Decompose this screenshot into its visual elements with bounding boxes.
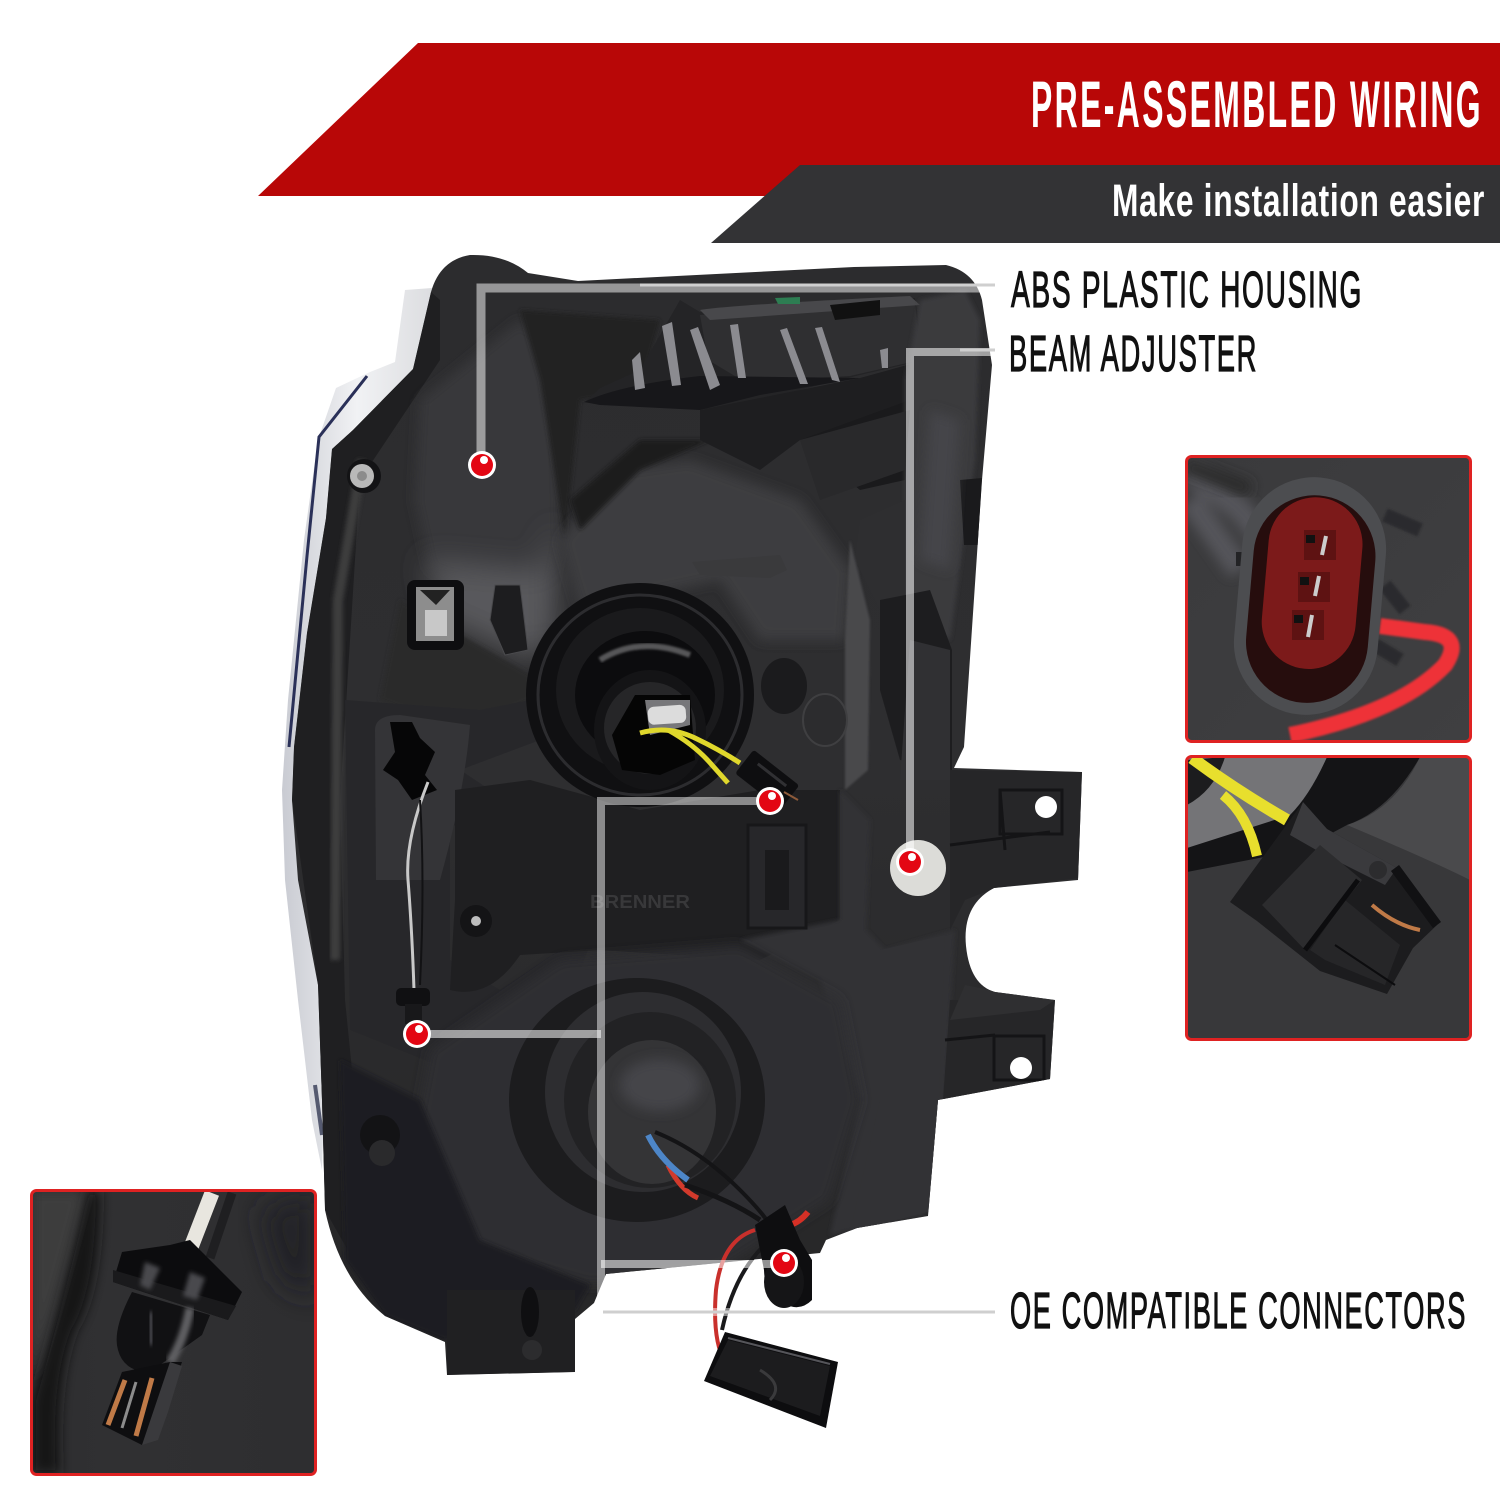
wire connector [735, 750, 799, 809]
recessed label [748, 825, 806, 928]
control box [704, 1332, 838, 1428]
callout line: ABS plastic housing [481, 285, 995, 455]
callout line: beam adjuster [910, 350, 995, 860]
banner: dark subtitle ribbon [711, 165, 1500, 243]
housing shading [292, 290, 1082, 1375]
pigtail wires [648, 1132, 808, 1362]
inset panel: wedge bulb socket [32, 1190, 316, 1474]
top ribs [632, 322, 888, 390]
pin hole [460, 905, 492, 937]
callout lines: OE connectors [417, 801, 995, 1312]
round knockouts [761, 658, 807, 714]
inset panel: yellow wire connector [1186, 756, 1470, 1040]
marker dot: yellow connector [756, 787, 784, 815]
stud and slot [360, 1115, 542, 1360]
chrome lens edge [282, 288, 432, 1170]
mounting holes [1035, 796, 1057, 818]
screw [347, 459, 381, 493]
OE connector [755, 1205, 812, 1308]
inset panel: three-pin connector [1185, 456, 1470, 742]
marker dot: housing [468, 451, 496, 479]
main bulb socket [526, 583, 754, 807]
housing body [292, 255, 1082, 1375]
label: beam adjuster: BEAM ADJUSTER [1009, 325, 1258, 382]
tab above socket [692, 555, 787, 578]
headlight assembly photo [282, 255, 1082, 1428]
lower bulb boot [509, 978, 765, 1222]
banner: red title ribbon [258, 43, 1500, 196]
embossed marks: BRENNER [590, 892, 690, 912]
marker dot: side marker socket [403, 1020, 431, 1048]
washer [890, 840, 946, 896]
grommet and thin wire [383, 722, 437, 1024]
chrome clip [407, 580, 464, 650]
marker dot: beam adjuster [896, 848, 924, 876]
marker dot: OE connector [770, 1249, 798, 1277]
